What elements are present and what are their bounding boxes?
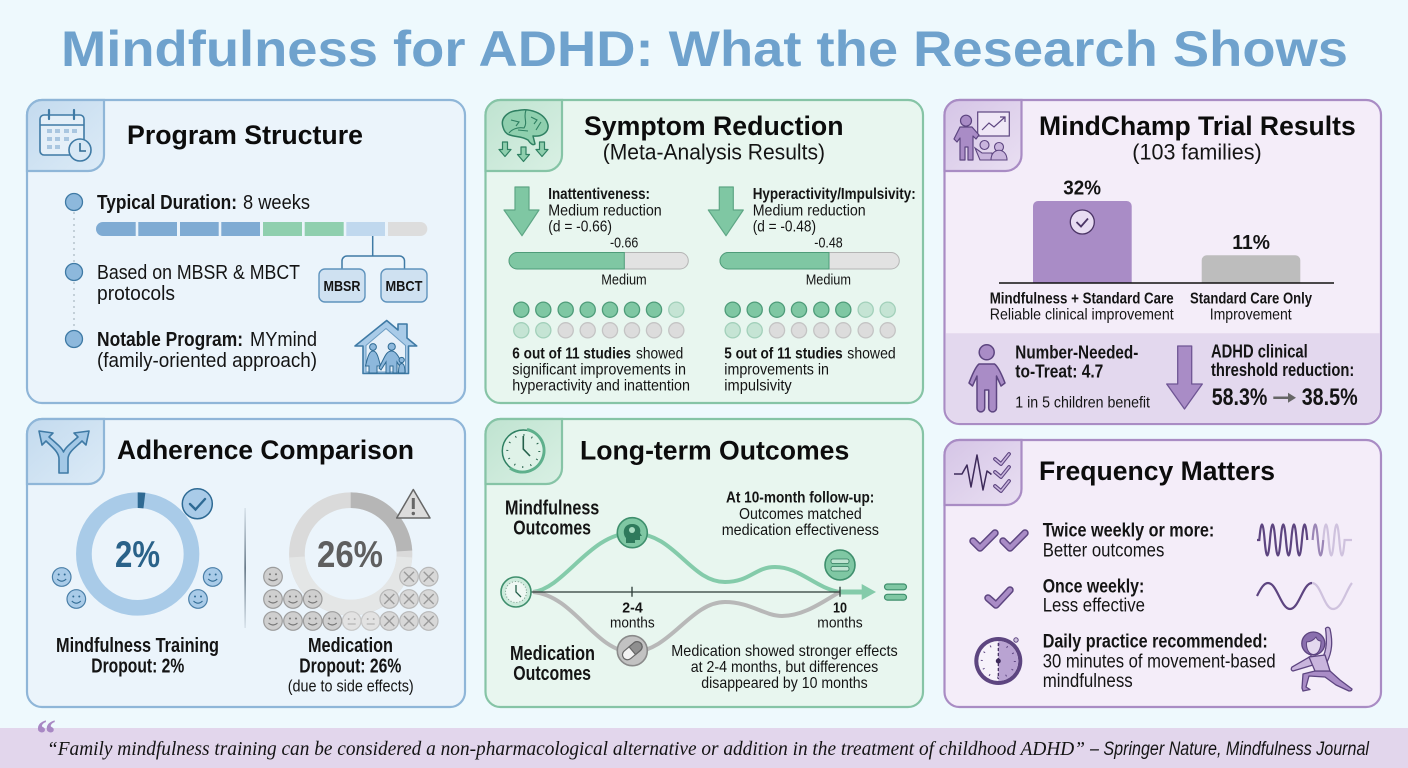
text: 6 out of 11 studies: hyperactivity and inattention: [512, 378, 690, 395]
axis label: 2-4 months: [610, 600, 655, 631]
bar: standard care 11%: [1202, 232, 1300, 283]
bar chart: improvement rates: [990, 177, 1334, 323]
icon: down arrow: [504, 187, 539, 236]
chart: low frequency wave: [1257, 583, 1352, 609]
text: 5 out of 11 studies: 5 out of 11 studies: [724, 345, 843, 362]
label: medication outcomes: Medication: [510, 643, 595, 665]
text: inattentiveness: [548, 186, 662, 236]
text: twice weekly: [1043, 521, 1214, 562]
text: 6 out of 11 studies: 6 out of 11 studies: [512, 345, 631, 362]
panel: adherence comparison: [27, 419, 465, 707]
column: inattentiveness: [504, 186, 690, 395]
text: once weekly: Once weekly:: [1043, 576, 1144, 597]
text: number needed to treat: 1 in 5 children benefit: [1015, 394, 1150, 411]
label: mindfulness outcomes: Mindfulness: [505, 497, 599, 519]
text: 5 out of 11 studies: impulsivity: [724, 378, 792, 395]
heading: mindchamp trial results: [1039, 111, 1356, 164]
icon tab: clock: [486, 419, 562, 484]
text: once weekly: Less effective: [1043, 596, 1145, 617]
donut chart: medication 26%: 26%: [317, 534, 383, 575]
text: clinical threshold reduction: [1211, 342, 1358, 411]
bar: standard care 11%: 11%: [1232, 232, 1270, 254]
icon tab: forking arrows: [27, 419, 104, 484]
column: hyperactivity: [708, 186, 916, 395]
effect bar: -0.48: [814, 235, 843, 252]
text: typical duration: Typical Duration:: [97, 192, 237, 214]
effect bar: Medium: [601, 271, 647, 288]
bar label: standard care: [1190, 290, 1312, 323]
icon: mindful head: [617, 518, 647, 548]
effect bar: [720, 235, 899, 288]
panel: program structure: [27, 100, 465, 403]
label: medication outcomes: Outcomes: [513, 663, 591, 685]
panel: symptom reduction: [486, 100, 923, 403]
text: protocols: protocols: [97, 283, 175, 305]
text: hyperactivity: (d = -0.48): [753, 219, 816, 236]
icon: pill: [617, 636, 647, 666]
text: daily practice: Daily practice recommended:: [1043, 631, 1268, 652]
text: clinical threshold reduction: ADHD clinical: [1211, 342, 1308, 362]
text: clinical threshold reduction: 38.5%: [1302, 384, 1358, 411]
icon: double check: [973, 533, 1025, 548]
text: notable program: (family-oriented approach): [97, 350, 317, 372]
footer quote band: [0, 711, 1408, 768]
text: notable program: Notable Program:: [97, 329, 243, 351]
dot grid: 6 of 11 studies: [514, 302, 684, 338]
label: mindfulness dropout: Dropout: 2%: [91, 655, 184, 677]
text: 6 out of 11 studies: significant improvements in: [512, 361, 686, 378]
heading: frequency matters: Frequency Matters: [1039, 456, 1275, 486]
text: clinical threshold reduction: 58.3%: [1212, 384, 1267, 411]
bar: mindfulness 32%: 32%: [1063, 177, 1101, 199]
row: daily practice: [974, 627, 1352, 692]
text: notable program: MYmind: [250, 329, 317, 351]
text: twice weekly: Better outcomes: [1043, 541, 1164, 562]
text: typical duration: 8 weeks: [243, 192, 310, 214]
text: inattentiveness: Inattentiveness:: [548, 186, 650, 203]
axis label: 2-4 months: 2-4: [622, 600, 643, 617]
label: medication dropout: [288, 635, 414, 696]
heading: mindchamp trial results: MindChamp Trial Results: [1039, 111, 1356, 141]
8-week progress bar: [96, 222, 427, 236]
text: medication note: Medication showed stronger effects: [671, 643, 898, 660]
label: mindfulness outcomes: [505, 497, 599, 539]
text: medication note: [671, 643, 898, 692]
icon: equals sign: [884, 584, 906, 600]
label: medication dropout: (due to side effects): [288, 676, 414, 696]
diagram: MBSR and MBCT boxes: MBSR: [324, 278, 361, 295]
text: 6 out of 11 studies: [512, 345, 690, 395]
row: once weekly: [988, 576, 1352, 617]
donut chart: medication 26%: [297, 500, 405, 608]
text: once weekly: [1043, 576, 1145, 617]
icon tab: teacher with chart: [944, 100, 1022, 171]
heading: mindchamp trial results: (103 families): [1132, 139, 1262, 164]
effect bar: [509, 235, 688, 288]
text: 10-month follow-up: [722, 490, 879, 539]
text: 6 out of 11 studies: showed: [636, 345, 683, 362]
text: daily practice: [1043, 631, 1276, 692]
text: protocols: Based on MBSR & MBCT: [97, 262, 300, 284]
quote text: “Family mindfulness training can be considered a non-pharmacological alternative or addition in the treatment of childhood ADHD”: [47, 738, 1085, 760]
heading: program structure: Program Structure: [127, 120, 363, 150]
text: medication note: disappeared by 10 months: [701, 675, 868, 692]
text: hyperactivity: Medium reduction: [753, 202, 866, 219]
text: hyperactivity: [753, 186, 916, 236]
heading: long-term outcomes: Long-term Outcomes: [580, 435, 849, 465]
bar label: standard care: Improvement: [1210, 306, 1292, 323]
axis label: 10 months: [817, 600, 863, 631]
label: medication outcomes: [510, 643, 595, 685]
bar: mindfulness 32%: [1033, 177, 1132, 283]
donut chart: mindfulness 2%: 2%: [115, 534, 160, 575]
text: twice weekly: Twice weekly or more:: [1043, 521, 1214, 542]
title: Mindfulness for ADHD: What the Research Shows: [61, 21, 1348, 77]
diagram: MBSR and MBCT boxes: MBCT: [386, 278, 422, 295]
icon: quotation mark: “: [36, 711, 56, 756]
text: 10-month follow-up: At 10-month follow-up:: [726, 490, 874, 507]
faces: medication: [264, 567, 438, 630]
icon tab: pulse and checks: [944, 440, 1022, 505]
text: inattentiveness: (d = -0.66): [548, 219, 612, 236]
text: 5 out of 11 studies: improvements in: [724, 361, 829, 378]
text: medication note: at 2-4 months, but differences: [691, 659, 878, 676]
text: number needed to treat: Number-Needed-: [1015, 342, 1138, 362]
icon: purple down arrow: [1167, 346, 1202, 409]
text: number needed to treat: to-Treat: 4.7: [1015, 361, 1103, 381]
bar label: standard care: Standard Care Only: [1190, 290, 1312, 307]
icon: stopwatch: [974, 637, 1022, 685]
icon: child figure: [969, 345, 1005, 412]
dot grid: 5 of 11 studies: [725, 302, 895, 338]
icon: family house: [355, 320, 417, 374]
icon: start clock: [501, 577, 531, 607]
diagram: MBSR and MBCT boxes: [319, 236, 427, 302]
text: 10-month follow-up: Outcomes matched: [739, 506, 862, 523]
panel: long-term outcomes: [486, 419, 923, 707]
panel: mindchamp trial results: [944, 100, 1381, 424]
text: clinical threshold reduction: threshold reduction:: [1211, 360, 1354, 380]
icon: single check: [988, 590, 1010, 605]
icon tab: brain with down arrows: [486, 100, 562, 171]
text: hyperactivity: Hyperactivity/Impulsivity:: [753, 186, 916, 203]
axis label: 2-4 months: months: [610, 614, 655, 631]
text: 5 out of 11 studies: [724, 345, 896, 395]
axis label: 10 months: 10: [833, 600, 847, 617]
icon: equal badge: [825, 550, 855, 580]
bar label: mindfulness: Mindfulness + Standard Care: [990, 290, 1174, 307]
icon: down arrow: [708, 187, 743, 236]
heading: adherence comparison: Adherence Comparison: [117, 435, 414, 465]
lower stats band: [946, 333, 1380, 423]
label: mindfulness outcomes: Outcomes: [513, 517, 591, 539]
effect bar: -0.66: [610, 235, 638, 252]
smiling faces: mindfulness: [52, 568, 222, 608]
icon: warning triangle: [397, 490, 430, 518]
text: daily practice: mindfulness: [1043, 671, 1133, 692]
donut chart: mindfulness 2%: [84, 500, 192, 608]
text: protocols: [97, 262, 300, 305]
text: daily practice: 30 minutes of movement-based: [1043, 651, 1276, 672]
axis label: 10 months: months: [817, 614, 863, 631]
icon: check badge: [182, 489, 212, 519]
line chart: outcome curves over time: [501, 518, 876, 666]
effect bar: Medium: [806, 271, 851, 288]
text: 10-month follow-up: medication effectiveness: [722, 522, 879, 539]
text: number needed to treat: [1015, 342, 1150, 411]
label: mindfulness dropout: [56, 635, 219, 677]
label: medication dropout: Medication: [308, 635, 393, 657]
text: 5 out of 11 studies: showed: [847, 345, 896, 362]
timeline bullets: [66, 194, 82, 348]
row: twice weekly: [973, 521, 1352, 562]
heading: symptom reduction: [584, 111, 844, 164]
text: notable program: [97, 329, 317, 372]
bar label: mindfulness: [990, 290, 1174, 323]
panel: frequency matters: [944, 440, 1381, 707]
text: inattentiveness: Medium reduction: [548, 202, 662, 219]
bar label: mindfulness: Reliable clinical improvement: [990, 306, 1174, 323]
heading: symptom reduction: Symptom Reduction: [584, 111, 844, 141]
chart: high frequency wave: [1257, 524, 1352, 556]
heading: symptom reduction: (Meta-Analysis Results): [603, 139, 825, 164]
icon tab: calendar with clock: [27, 100, 104, 171]
icon: yoga child: [1291, 627, 1352, 691]
label: mindfulness dropout: Mindfulness Training: [56, 635, 219, 657]
label: medication dropout: Dropout: 26%: [299, 655, 401, 677]
